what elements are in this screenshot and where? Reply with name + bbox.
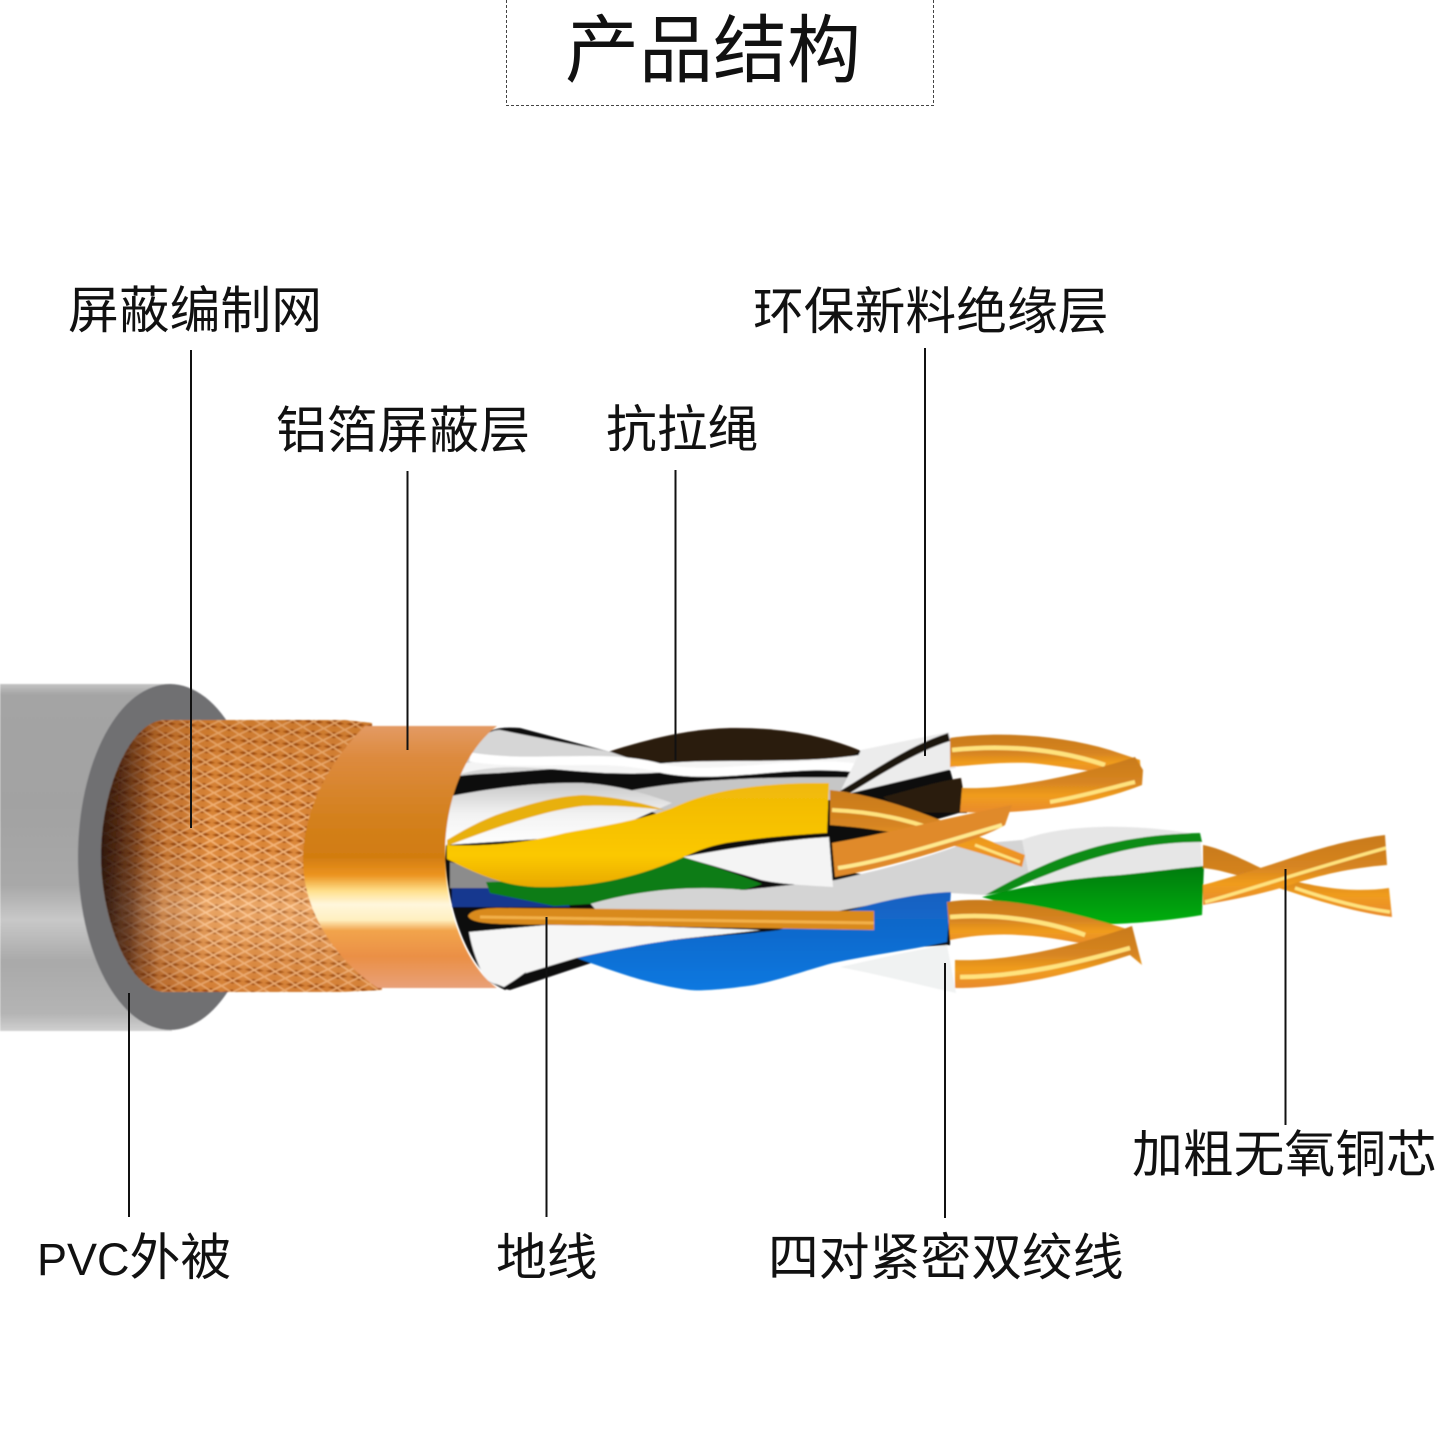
label: copper core: 加粗无氧铜芯 [1132, 1126, 1437, 1183]
top copper pair [950, 735, 1143, 813]
title: 产品结构 [565, 9, 861, 92]
inner conductors bundle [445, 728, 1040, 993]
ground wire [468, 908, 874, 930]
white top right strand [840, 732, 967, 813]
aluminium foil shield [303, 726, 497, 988]
label: rip cord: 抗拉绳 [606, 401, 758, 458]
green pair white wire [985, 827, 1203, 900]
grey upper strand [458, 730, 640, 776]
green wire [982, 866, 1204, 925]
PVC outer jacket [0, 684, 262, 1031]
copper conductors [830, 735, 1392, 988]
black inner end lower [486, 972, 526, 990]
grey lower strand [590, 840, 1040, 925]
title box [506, 0, 934, 106]
braided shield [100, 718, 385, 994]
white wire copper [832, 805, 1012, 877]
rip cord [452, 757, 869, 788]
brown wire end [883, 778, 967, 813]
dark blue inner strand [452, 888, 570, 907]
green pair copper [1203, 835, 1392, 917]
blue wire [577, 892, 951, 990]
label: PVC jacket: PVC外被 [37, 1229, 231, 1286]
label: insulation: 环保新料绝缘层 [753, 283, 1109, 340]
white wire [683, 837, 833, 887]
white strand with yellow stripe [445, 783, 672, 846]
label: foil shield: 铝箔屏蔽层 [276, 402, 530, 459]
yellow wire [447, 783, 829, 887]
speckled grey inner strand [450, 862, 540, 892]
grey middle strand [610, 777, 870, 815]
cable illustration [0, 684, 1392, 1031]
white lower right strand [840, 945, 956, 993]
green wire segment [486, 857, 762, 906]
label: twisted pairs: 四对紧密双绞线 [768, 1229, 1124, 1286]
label: ground wire: 地线 [496, 1229, 598, 1286]
blue pair copper [947, 900, 1142, 988]
brown twisted strand [608, 728, 861, 762]
label: braided mesh: 屏蔽编制网 [68, 282, 322, 339]
yellow wire copper [830, 790, 1025, 867]
white lower left strand [469, 925, 761, 987]
